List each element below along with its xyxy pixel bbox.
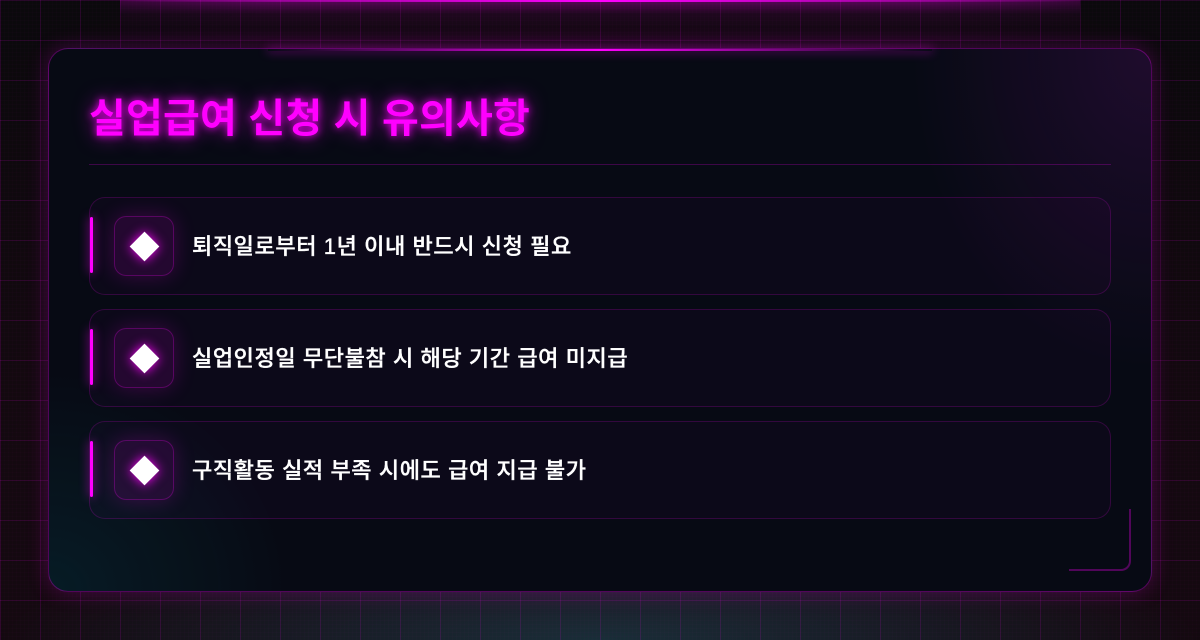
icon: diamond 2 bbox=[114, 328, 174, 388]
list item 3 bbox=[89, 421, 1111, 519]
title: 실업급여 신청 시 유의사항 bbox=[89, 97, 530, 141]
top neon bar bbox=[120, 0, 1080, 2]
accent bar 3 bbox=[90, 441, 93, 497]
text 3: 구직활동 실적 부족 시에도 급여 지급 불가 bbox=[192, 458, 587, 483]
list item 2 bbox=[89, 309, 1111, 407]
panel: notice card bbox=[48, 48, 1152, 592]
icon: diamond 3 bbox=[114, 440, 174, 500]
corner bracket bbox=[1069, 509, 1131, 571]
list item 1 bbox=[89, 197, 1111, 295]
text 1: 퇴직일로부터 1년 이내 반드시 신청 필요 bbox=[192, 234, 572, 259]
accent bar 2 bbox=[90, 329, 93, 385]
card top neon bar bbox=[268, 49, 932, 51]
text 2: 실업인정일 무단불참 시 해당 기간 급여 미지급 bbox=[192, 346, 628, 371]
top glow band bbox=[120, 0, 1080, 40]
accent bar 1 bbox=[90, 217, 93, 273]
icon: diamond 1 bbox=[114, 216, 174, 276]
